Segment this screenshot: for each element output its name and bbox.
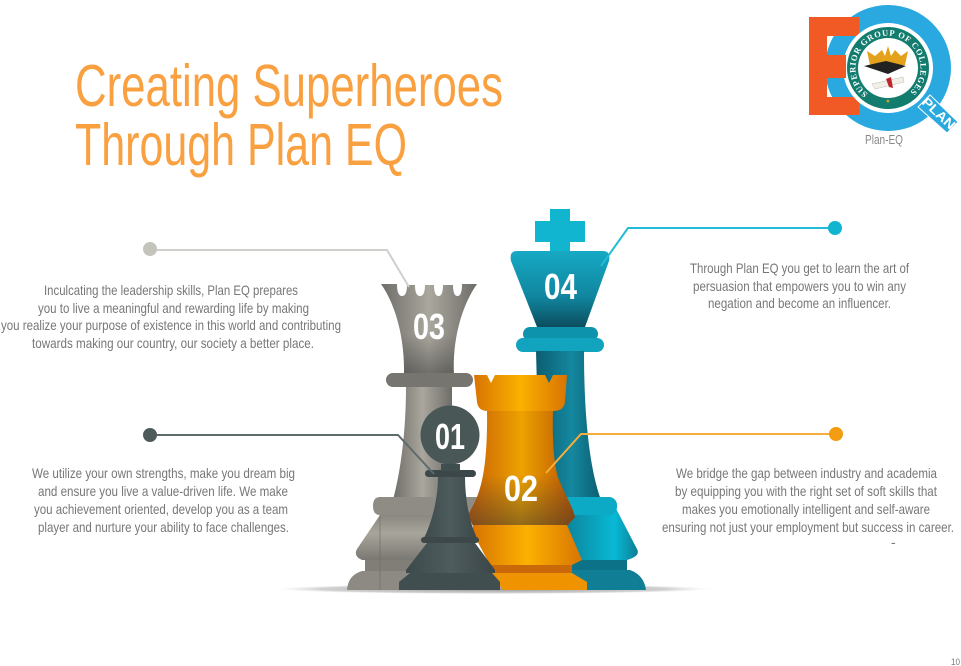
text block: 03: Inculcating the leadership skills, Plan EQ prepares xyxy=(44,282,298,298)
text block: 03: you to live a meaningful and rewarding life by making xyxy=(38,300,309,316)
logo: Plan EQ: PLAN xyxy=(919,94,958,132)
logo: Plan EQ: ★ xyxy=(885,98,891,105)
connector: 02 xyxy=(546,427,843,473)
number 02: 02 xyxy=(504,468,538,509)
text block: 03: you realize your purpose of existence in this world and contributing xyxy=(1,317,341,333)
logo: Plan EQ: Plan-EQ xyxy=(865,133,903,147)
number 04: 04 xyxy=(544,266,577,307)
text block: 04: negation and become an influencer. xyxy=(708,295,891,311)
text block: 01: and ensure you live a value-driven life. We make xyxy=(38,483,288,499)
connector: 01 xyxy=(143,428,434,474)
text block: 04: persuasion that empowers you to win any xyxy=(693,278,906,294)
chess piece 04: teal king xyxy=(511,209,646,590)
connector: 03 xyxy=(143,242,409,287)
text block: 04: Through Plan EQ you get to learn the art of xyxy=(690,260,909,276)
chess piece 03: gray queen xyxy=(347,284,480,590)
text block: 04 xyxy=(690,260,909,311)
text block: 01: you achievement oriented, develop you as a team xyxy=(34,501,288,517)
title: Creating Superheroes xyxy=(75,53,503,119)
text block: 02 xyxy=(662,465,954,550)
text block: 02: - xyxy=(891,534,896,550)
chess piece 01: dark pawn xyxy=(399,406,500,590)
logo: Plan EQ xyxy=(809,5,958,147)
text block: 01: We utilize your own strengths, make you dream big xyxy=(32,465,295,481)
title xyxy=(75,53,503,178)
ground shadow xyxy=(276,584,712,594)
number 03: 03 xyxy=(413,306,445,347)
text block: 01: player and nurture your ability to face challenges. xyxy=(38,519,289,535)
text block: 03 xyxy=(1,282,341,351)
title: Through Plan EQ xyxy=(75,112,407,178)
logo: Plan EQ: SUPERIOR GROUP OF COLLEGES xyxy=(850,30,926,97)
text block: 01 xyxy=(32,465,295,535)
text block: 03: towards making our country, our society a better place. xyxy=(32,335,314,351)
connector: 04 xyxy=(601,221,842,266)
number 01: 01 xyxy=(435,416,465,457)
chess piece 02: orange rook xyxy=(468,375,587,590)
